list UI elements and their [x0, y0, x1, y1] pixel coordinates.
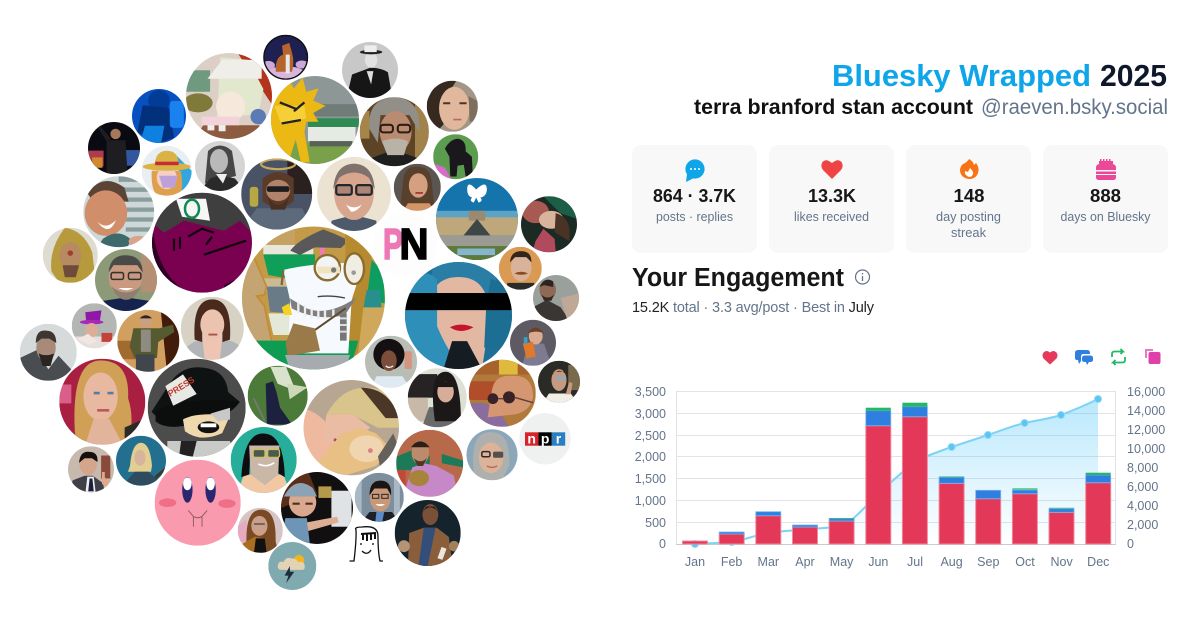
avatar: man with moustache [499, 247, 542, 290]
month labels: Dec [1087, 555, 1109, 569]
avatar: blonde woman on red [59, 359, 145, 445]
avatar: black and white woman [195, 141, 245, 191]
avatar: black dog on grass [433, 134, 478, 179]
avatar: Kirby [155, 460, 241, 546]
panel: day posting streak [906, 145, 1031, 253]
avatar: woman holding crisps [510, 320, 556, 366]
avatar bubble cluster [20, 35, 580, 590]
month labels: May [830, 555, 854, 569]
icon: flame [960, 159, 979, 179]
avatar: woman in blue light [132, 89, 186, 143]
panel: posts and replies: posts · replies [656, 209, 733, 224]
right axis labels: 12,000 [1127, 423, 1165, 437]
right axis labels: 16,000 [1127, 385, 1165, 399]
panel: posts and replies [632, 145, 757, 253]
icon: legend replies [1075, 350, 1093, 365]
avatar: PN logo: N [400, 220, 428, 269]
left axis labels: 2,000 [635, 450, 666, 464]
icon: legend reposts [1112, 349, 1125, 365]
left axis labels: 1,500 [635, 472, 666, 486]
avatar: black and white man in hat [342, 42, 398, 98]
left axis labels: 2,500 [635, 429, 666, 443]
avatar: kid with hat drawing [281, 472, 353, 544]
avatar: smiling man with glasses [355, 473, 404, 522]
icon: cake [1096, 159, 1116, 180]
right axis labels: 10,000 [1127, 442, 1165, 456]
avatar: woman with long hair [394, 164, 441, 211]
panel: likes received: 13.3K [808, 186, 856, 206]
avatar: painting of man in brown jacket [395, 500, 461, 566]
avatar: skull painting [469, 360, 536, 427]
month labels: Aug [940, 555, 963, 569]
avatar: PN logo [373, 213, 437, 277]
panel: days on Bluesky [1043, 145, 1168, 253]
month labels: Nov [1050, 555, 1073, 569]
right axis labels: 2,000 [1127, 518, 1158, 532]
avatar: anime witch [183, 53, 272, 139]
avatar: onion character [152, 193, 252, 293]
avatar: crying bearded man [20, 324, 77, 381]
cumulative area and line [692, 396, 1102, 548]
title: 2025 [1100, 58, 1167, 93]
month labels [685, 555, 1109, 569]
icon: heart [821, 160, 843, 179]
icon: info [856, 270, 870, 284]
avatar: NPR logo [519, 413, 571, 464]
panel: days on Bluesky: 888 [1090, 186, 1121, 206]
avatar: man in suit on stage [88, 122, 141, 174]
avatar: black cat with wings [248, 366, 308, 426]
subtitle: display name and handle: @raeven.bsky.social [981, 96, 1168, 119]
avatar: smiling woman by blinds [83, 176, 154, 247]
right axis labels [1127, 385, 1165, 551]
avatar: man in green jacket [117, 310, 179, 373]
avatar: PN logo: P [383, 220, 403, 269]
avatar: weather cloud icon [268, 542, 316, 590]
avatar: blue haired woman with black bar [405, 262, 512, 369]
chart: monthly engagement [676, 391, 1116, 548]
avatar: bald man with glasses [317, 157, 391, 231]
subtitle: display name and handle [694, 96, 1168, 119]
right axis labels: 4,000 [1127, 499, 1158, 513]
avatar: PRESS hat cartoon: PRESS [166, 375, 196, 399]
avatar: man in grey reclining [533, 275, 579, 321]
left axis labels: 3,000 [635, 407, 666, 421]
avatar: bearded man with halo [241, 158, 312, 230]
icon: legend quotes [1145, 349, 1160, 364]
avatar: woman with fringe and long black hair [408, 368, 467, 427]
panel: days on Bluesky: days on Bluesky [1060, 209, 1151, 224]
avatar: glasses man smiling [95, 249, 157, 311]
heading: Your Engagement: Your Engagement [632, 264, 844, 292]
right axis labels: 14,000 [1127, 404, 1165, 418]
icon: legend heart [1042, 351, 1058, 364]
avatar: woman with dark curly afro [365, 336, 417, 388]
avatar: NPR logo: p [541, 431, 549, 447]
panel: likes received [769, 145, 894, 253]
avatar: NPR logo: r [556, 431, 562, 447]
month labels: Oct [1015, 555, 1035, 569]
avatar: older woman with grey hair and glasses [466, 429, 518, 480]
avatar: man with raised finger [68, 446, 114, 492]
avatar: sun mascot at football match [271, 76, 359, 164]
panel: day posting streak: 148 [954, 186, 984, 206]
avatar: golden hooded figure [43, 228, 98, 283]
month labels: Feb [721, 555, 742, 569]
panel: day posting streak: day posting [936, 209, 1001, 224]
right axis labels: 0 [1127, 537, 1134, 551]
panel: posts and replies: 864 · 3.7K [653, 186, 736, 206]
avatar: woman close up [427, 81, 478, 132]
avatar: Louvre with butterfly [436, 178, 518, 260]
left axis labels [635, 385, 666, 551]
avatar: man with sunglasses on phone [538, 361, 580, 403]
title: Bluesky Wrapped [832, 58, 1091, 93]
right axis labels: 6,000 [1127, 480, 1158, 494]
avatar: PRESS hat cartoon [148, 359, 246, 457]
right axis labels: 8,000 [1127, 461, 1158, 475]
month labels: Sep [977, 555, 999, 569]
stacked bars: replies [719, 407, 1111, 534]
avatar: brunette woman [181, 297, 244, 360]
month labels: Mar [758, 555, 779, 569]
left axis labels: 500 [645, 516, 666, 530]
avatar: purple hat kid [72, 303, 117, 348]
stacked bars: reposts [829, 403, 1111, 519]
avatar: line drawing of a face [350, 527, 383, 561]
month labels: Jun [868, 555, 888, 569]
subtitle: display name and handle: terra branford stan account [694, 96, 973, 119]
engagement summary text: 15.2K total · 3.3 avg/post · Best in July [632, 300, 875, 316]
month labels: Apr [795, 555, 815, 569]
left axis labels: 1,000 [635, 494, 666, 508]
avatar: Kronk cartoon [231, 427, 297, 493]
panel: likes received: likes received [794, 209, 869, 224]
month labels: Jul [907, 555, 923, 569]
avatar: girl with straw hat and mask [142, 146, 192, 196]
chart legend icons [1042, 349, 1160, 365]
avatar: NPR logo: n [527, 431, 536, 447]
avatar: man with coconut [396, 430, 463, 497]
icon: comment bubble [685, 159, 705, 182]
avatar: hamster with bong [263, 34, 308, 80]
stacked bars: likes [682, 417, 1111, 544]
avatar: cartoon cup with glasses and hat [235, 220, 395, 375]
avatar: red haired woman looking up [521, 196, 577, 252]
left axis labels: 3,500 [635, 385, 666, 399]
avatar: grey haired man with glasses [360, 97, 429, 166]
panel: day posting streak: streak [951, 225, 986, 240]
month labels: Jan [685, 555, 705, 569]
avatar: woman with glasses and curly hair [238, 508, 283, 553]
avatar: blonde woman with cat [304, 380, 399, 475]
left axis labels: 0 [659, 537, 666, 551]
avatar: blonde woman against blue [116, 436, 166, 486]
